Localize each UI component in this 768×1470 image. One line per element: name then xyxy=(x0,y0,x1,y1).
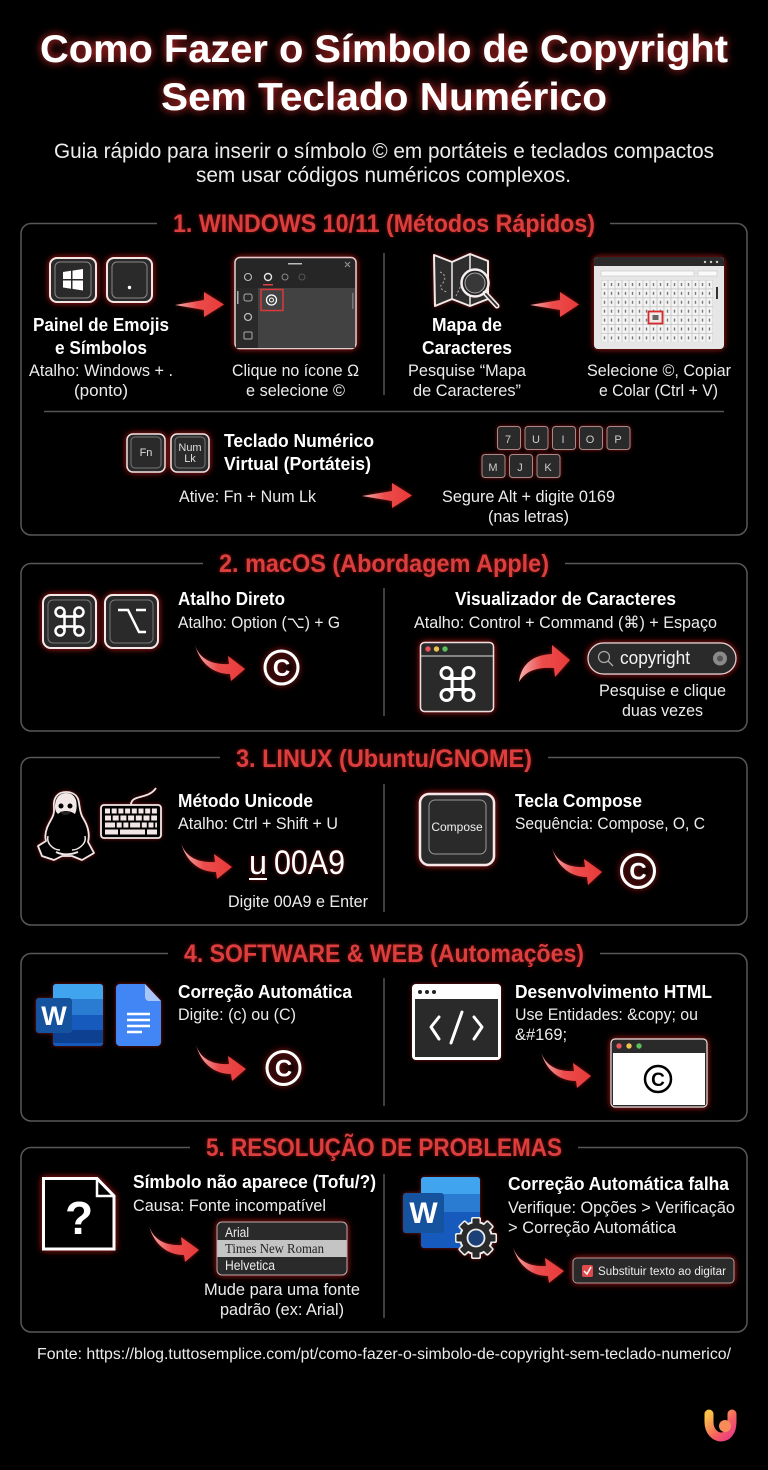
text: autocorrect failure: > Correção Automática xyxy=(508,1219,677,1237)
text: map xyxy=(408,315,527,400)
text: click icon: Clique no ícone Ω xyxy=(232,362,359,380)
icon: copyright: C xyxy=(629,858,647,886)
subtitle xyxy=(54,140,714,187)
text: autocorrect failure xyxy=(508,1174,735,1237)
search field xyxy=(588,643,736,674)
icon: command window xyxy=(420,642,494,712)
title xyxy=(40,28,728,119)
text: change font: Mude para uma fonte xyxy=(204,1281,360,1299)
icon: letter keys xyxy=(482,426,630,478)
text: alt code xyxy=(442,488,615,526)
text: html: Use Entidades: &copy; ou xyxy=(515,1006,698,1024)
icon: Tux xyxy=(38,792,94,860)
icon: emoji window xyxy=(235,258,356,348)
unicode sequence xyxy=(249,844,345,882)
icon: letter keys: 7 xyxy=(505,434,511,446)
text: autocorrect failure: Correção Automática falha xyxy=(508,1174,730,1194)
icon: compose key: Compose xyxy=(431,820,483,834)
icon: missing glyph document xyxy=(44,1178,114,1249)
icon: Num Lk key: Num xyxy=(178,442,202,454)
text: compose key: Sequência: Compose, O, C xyxy=(515,815,705,833)
icon: letter keys: O xyxy=(586,434,595,446)
text: alt code: Segure Alt + digite 0169 xyxy=(442,488,615,506)
font list xyxy=(217,1222,347,1275)
arrow xyxy=(530,292,579,317)
heading: Software and web: 4. SOFTWARE & WEB (Automações) xyxy=(184,940,584,968)
icon: Word with gear xyxy=(403,1177,497,1259)
title: Sem Teclado Numérico xyxy=(161,76,607,119)
text: html xyxy=(515,982,712,1044)
icon: letter keys: K xyxy=(544,462,552,474)
panel: Windows xyxy=(21,210,747,535)
icon: letter keys: J xyxy=(517,462,523,474)
icon: Fn key: Fn xyxy=(140,447,152,459)
text: emoji panel: (ponto) xyxy=(74,382,128,400)
icon: compose key xyxy=(420,794,494,865)
arrow xyxy=(175,292,224,317)
icon: character map window xyxy=(594,257,724,349)
panel: Linux xyxy=(21,745,747,925)
text: autocorrect: Digite: (c) ou (C) xyxy=(178,1006,296,1024)
text: character viewer: Visualizador de Caracteres xyxy=(455,589,676,609)
text: change font: padrão (ex: Arial) xyxy=(220,1301,344,1319)
arrow xyxy=(513,1247,564,1283)
icon: letter keys: I xyxy=(561,434,565,446)
arrow xyxy=(196,1045,246,1081)
arrow xyxy=(541,1052,591,1088)
arrow xyxy=(552,848,602,885)
checkbox option xyxy=(573,1258,734,1283)
icon: Word with gear: W xyxy=(409,1197,438,1230)
text: html: Desenvolvimento HTML xyxy=(515,982,712,1002)
icon: character map xyxy=(434,254,497,306)
icon: copyright xyxy=(622,854,654,888)
icon: copyright: C xyxy=(273,655,290,682)
icon: browser with copyright xyxy=(611,1039,707,1107)
arrow xyxy=(519,645,570,682)
text: unicode method xyxy=(178,791,338,833)
text: map: Caracteres xyxy=(422,338,512,358)
text: autocorrect xyxy=(178,982,353,1024)
text: virtual numpad: Ative: Fn + Num Lk xyxy=(179,488,317,506)
icon: letter keys: U xyxy=(532,434,540,446)
text: unicode method: Atalho: Ctrl + Shift + U xyxy=(178,815,338,833)
arrow xyxy=(181,843,232,879)
unicode sequence: u xyxy=(249,844,267,882)
subtitle: Guia rápido para inserir o símbolo © em portáteis e teclados compactos xyxy=(54,140,714,163)
text: map: de Caracteres” xyxy=(413,382,521,400)
unicode sequence: 00A9 xyxy=(274,844,345,882)
icon: Google Docs xyxy=(116,984,161,1046)
text: emoji panel: Atalho: Windows + . xyxy=(29,362,173,380)
text: virtual numpad: Virtual (Portáteis) xyxy=(224,454,371,474)
source line: Fonte: https://blog.tuttosemplice.com/pt/como-fazer-o-simbolo-de-copyright-sem-teclado-numerico/ xyxy=(37,1346,732,1363)
text: search hint: Pesquise e clique xyxy=(599,682,726,700)
text: select: e Colar (Ctrl + V) xyxy=(599,382,718,400)
title: Como Fazer o Símbolo de Copyright xyxy=(40,28,728,71)
icon: period key xyxy=(107,258,152,302)
text: direct shortcut: Atalho Direto xyxy=(178,589,285,609)
text: emoji panel: e Símbolos xyxy=(55,338,147,358)
text: direct shortcut xyxy=(178,589,340,632)
text: unicode method: Método Unicode xyxy=(178,791,313,811)
text: map: Mapa de xyxy=(432,315,502,335)
text: search hint xyxy=(599,682,726,720)
icon: Word xyxy=(36,984,103,1046)
icon: letter keys: P xyxy=(614,434,622,446)
text: virtual numpad: Teclado Numérico xyxy=(224,431,374,451)
text: select xyxy=(587,362,731,400)
logo xyxy=(709,1414,732,1437)
text: symbol missing xyxy=(133,1172,376,1215)
font list: Arial xyxy=(225,1225,249,1240)
text: map: Pesquise “Mapa xyxy=(408,362,527,380)
arrow xyxy=(149,1226,199,1262)
text: direct shortcut: Atalho: Option (⌥) + G xyxy=(178,614,340,632)
icon: browser with copyright: C xyxy=(651,1070,665,1091)
text: character viewer xyxy=(414,589,717,632)
subtitle: sem usar códigos numéricos complexos. xyxy=(196,164,571,187)
text: autocorrect failure: Verifique: Opções > Verificação xyxy=(508,1199,735,1217)
icon: Fn key xyxy=(127,434,165,472)
icon: Word: W xyxy=(41,1001,67,1031)
text: change font xyxy=(204,1281,360,1319)
heading: Windows: 1. WINDOWS 10/11 (Métodos Rápidos) xyxy=(173,210,595,238)
arrow xyxy=(362,483,412,508)
text: compose key xyxy=(515,791,705,833)
icon: copyright xyxy=(267,1052,300,1084)
panel: Troubleshooting xyxy=(21,1132,747,1332)
icon: keyboard xyxy=(101,788,161,838)
text: select: Selecione ©, Copiar xyxy=(587,362,731,380)
text: click icon xyxy=(232,362,359,400)
text: character viewer: Atalho: Control + Command (⌘) + Espaço xyxy=(414,614,717,632)
search field: copyright xyxy=(620,648,690,668)
icon: option key xyxy=(105,595,158,648)
icon: Num Lk key: Lk xyxy=(184,453,196,465)
text: symbol missing: Causa: Fonte incompatível xyxy=(133,1197,326,1215)
font list: Times New Roman xyxy=(225,1241,324,1256)
panel: macOS xyxy=(21,550,747,731)
heading: macOS: 2. macOS (Abordagem Apple) xyxy=(219,550,549,578)
arrow xyxy=(195,645,245,681)
text: enter: Digite 00A9 e Enter xyxy=(228,893,368,911)
icon: missing glyph document: ? xyxy=(65,1192,93,1244)
text: compose key: Tecla Compose xyxy=(515,791,642,811)
text: alt code: (nas letras) xyxy=(488,508,569,526)
panel: Software and web xyxy=(21,940,747,1121)
checkbox option: Substituir texto ao digitar xyxy=(598,1266,726,1278)
icon: command key xyxy=(43,595,96,648)
icon: letter keys: M xyxy=(488,462,498,474)
text: emoji panel: Painel de Emojis xyxy=(33,315,169,335)
icon: Windows key xyxy=(50,258,96,302)
text: click icon: e selecione © xyxy=(246,382,345,400)
text: symbol missing: Símbolo não aparece (Tofu/?) xyxy=(133,1172,376,1192)
text: emoji panel xyxy=(29,315,173,400)
font list: Helvetica xyxy=(225,1258,275,1273)
icon: code window xyxy=(412,984,501,1060)
text: virtual numpad xyxy=(179,431,374,506)
text: html: &#169; xyxy=(515,1026,567,1044)
text: autocorrect: Correção Automática xyxy=(178,982,353,1002)
heading: Linux: 3. LINUX (Ubuntu/GNOME) xyxy=(236,745,532,773)
icon: copyright: C xyxy=(275,1056,292,1082)
text: search hint: duas vezes xyxy=(622,702,703,720)
heading: Troubleshooting: 5. RESOLUÇÃO DE PROBLEMAS xyxy=(206,1132,562,1162)
icon: copyright xyxy=(265,651,298,684)
icon: Num Lk key xyxy=(171,434,209,472)
